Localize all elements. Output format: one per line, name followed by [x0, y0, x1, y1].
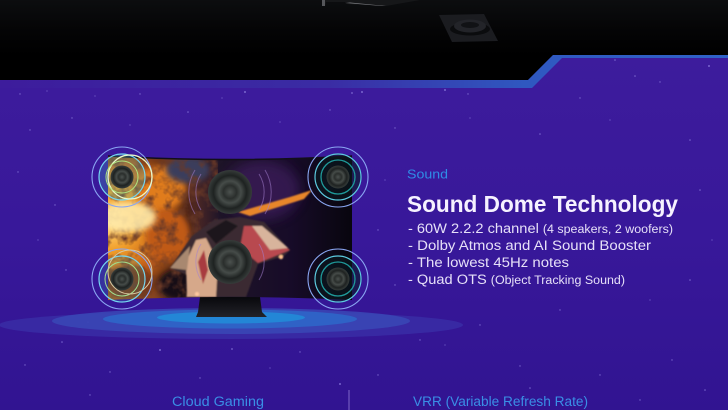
speaker top left with rings: [92, 147, 152, 207]
heading: Sound Dome Technology: [407, 191, 678, 217]
bottom divider: [348, 390, 350, 410]
orange flame beam: [238, 190, 312, 216]
bottom label: VRR: VRR (Variable Refresh Rate): [413, 394, 588, 409]
spaceship: [170, 217, 290, 297]
feature list: - Quad OTS (Object Tracking Sound): [408, 272, 625, 287]
explosion texture: [108, 155, 218, 301]
TV screen: [108, 156, 352, 300]
speaker bottom right with rings: [308, 249, 368, 309]
partial device at top: [322, 0, 420, 6]
speaker top right with rings: [308, 147, 368, 207]
sound ripple platform: [0, 308, 463, 339]
small speaker module: [439, 14, 498, 42]
black top section with angled edge: [0, 0, 728, 80]
bright explosion core: [100, 202, 156, 232]
feature list: - The lowest 45Hz notes: [408, 255, 569, 270]
feature list: - Dolby Atmos and AI Sound Booster: [408, 238, 652, 253]
curved TV with game scene: [108, 155, 352, 317]
feature list: - 60W 2.2.2 channel (4 speakers, 2 woofers): [408, 221, 673, 236]
feature list: [408, 221, 673, 287]
sound text block: [407, 166, 678, 287]
TV stand: [196, 297, 267, 317]
centre speaker bottom with arcs: [196, 240, 264, 284]
speaker bottom left with rings: [92, 249, 152, 309]
category label: Sound: [407, 166, 448, 182]
TV top edge: [108, 156, 352, 160]
centre speaker top with arcs: [189, 170, 271, 214]
bottom label: cloud gaming: Cloud Gaming: [172, 394, 264, 409]
blue angled accent band: [0, 55, 728, 88]
